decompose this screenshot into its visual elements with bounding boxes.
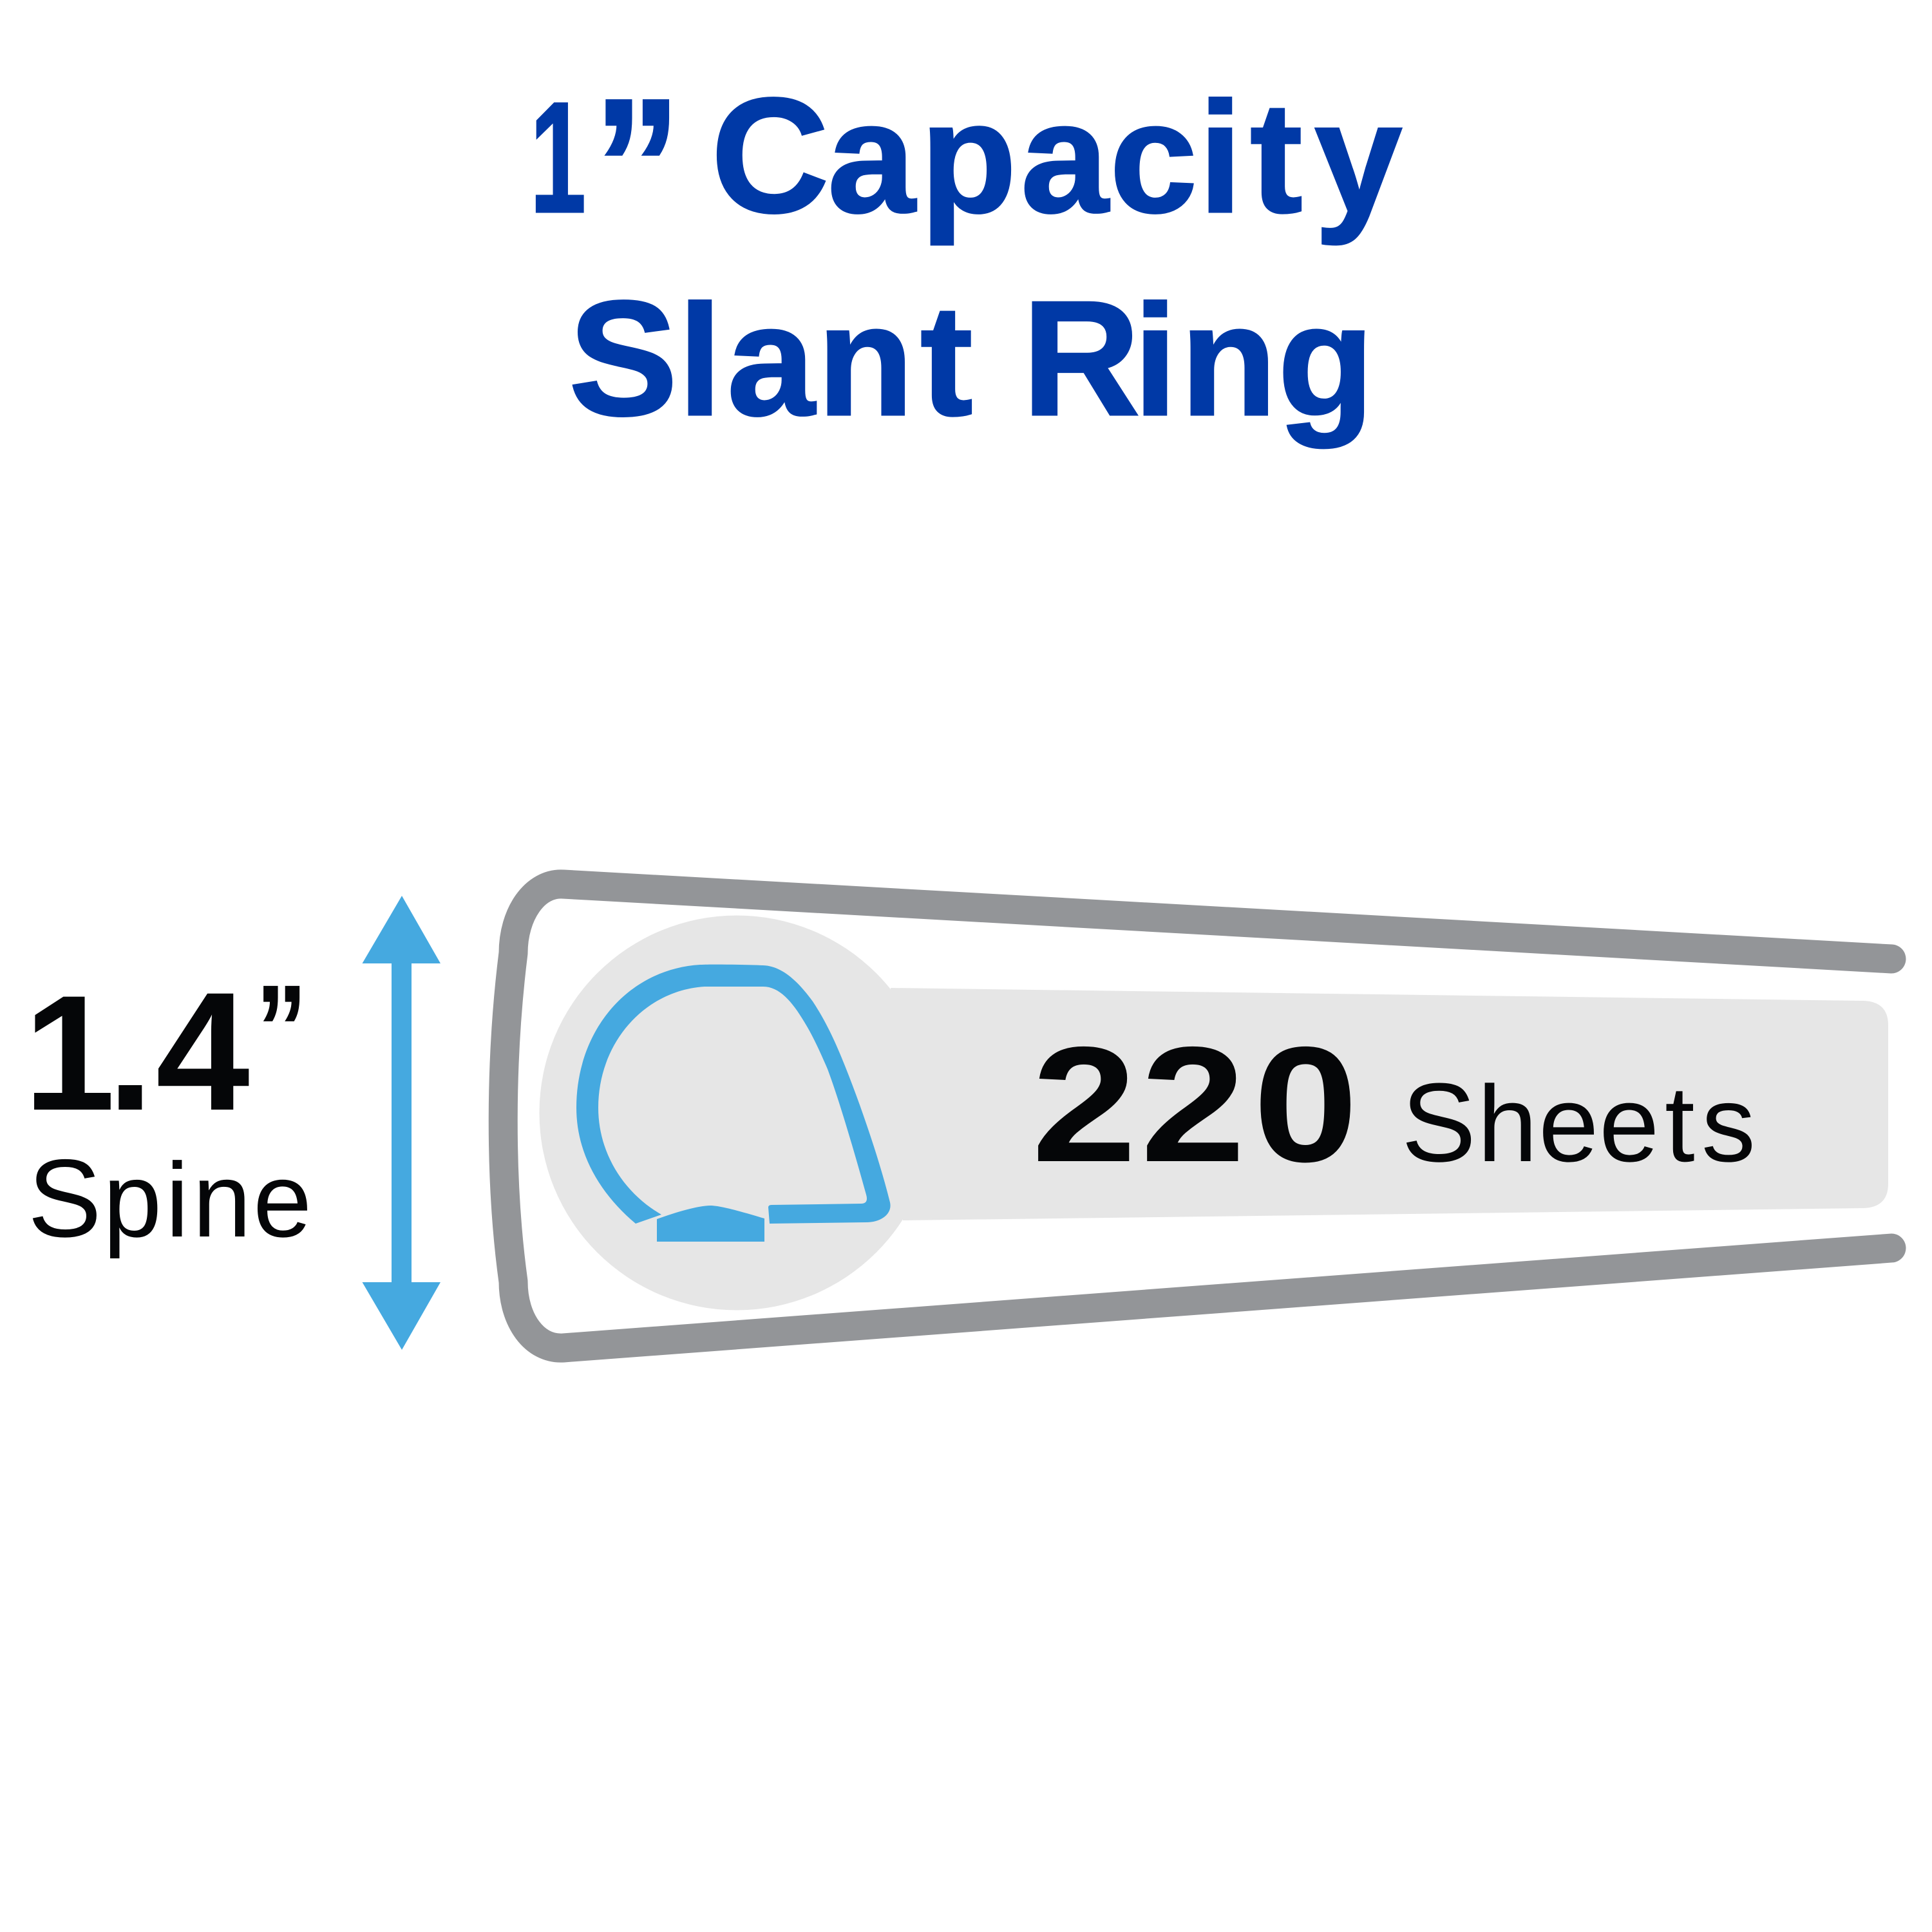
- spine measurement label: [24, 957, 312, 1260]
- sheet count label: [1032, 1013, 1756, 1197]
- title: Slant: [569, 267, 973, 450]
- title: Capacity: [711, 64, 1402, 247]
- spine measurement label: ”: [256, 959, 307, 1099]
- binder cover outline: [503, 884, 1891, 1348]
- sheet count label: 220: [1032, 1013, 1358, 1197]
- spine measurement label: 1.4: [24, 957, 251, 1146]
- title: Ring: [1022, 267, 1374, 450]
- icon: double-headed spine arrow: [362, 896, 440, 1350]
- title: 1: [530, 69, 586, 245]
- icon: slant ring: [576, 965, 891, 1242]
- title: ”: [593, 58, 681, 274]
- sheet count label: Sheets: [1401, 1059, 1756, 1185]
- spine measurement label: Spine: [28, 1137, 312, 1260]
- sheet capacity panel: [540, 916, 1888, 1310]
- title: [530, 58, 1402, 450]
